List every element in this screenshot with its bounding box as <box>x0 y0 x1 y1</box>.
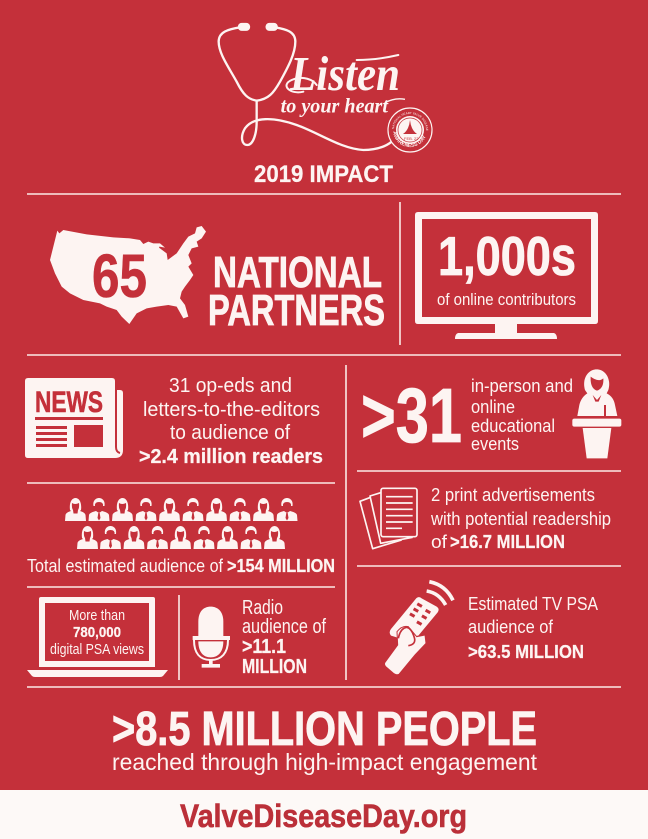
stethoscope tube and ear pieces <box>219 24 392 150</box>
text: of online contributors: of online contributors <box>437 290 576 309</box>
panel: TV PSA audience <box>384 582 598 675</box>
text: radio audience: audience of <box>242 616 326 638</box>
panel: print advertisements <box>360 485 611 552</box>
number: >31: >31 <box>361 373 462 459</box>
text: educational events: online <box>471 396 515 417</box>
text: educational events: events <box>471 433 519 454</box>
script tagline to your heart: to your heart <box>281 96 389 118</box>
footer URL: ValveDiseaseDay.org <box>180 798 467 834</box>
heading: 2019 IMPACT: 2019 IMPACT <box>254 161 393 188</box>
number: 1,000s: 1,000s <box>438 225 576 287</box>
text: radio audience <box>242 597 326 678</box>
panel: total estimated audience <box>27 498 335 576</box>
panel: educational events <box>361 369 621 459</box>
logo: stethoscope and Listen to your heart <box>218 22 433 153</box>
text: print advertisements: >16.7 MILLION <box>450 532 565 552</box>
text: print advertisements: 2 print advertisements <box>431 485 595 505</box>
text: national partners: NATIONAL <box>213 248 382 297</box>
headline: 8.5 million people: >8.5 MILLION PEOPLE <box>112 703 537 756</box>
text: digital PSA views: 780,000 <box>73 625 121 641</box>
text: digital PSA views <box>50 608 144 658</box>
text: educational events: educational <box>471 415 555 436</box>
text: op-eds description: letters-to-the-editors <box>143 399 320 421</box>
panel: online contributors <box>415 212 598 339</box>
text: op-eds description: 31 op-eds and <box>169 375 292 397</box>
icon: crowd of people <box>65 498 298 549</box>
text: print advertisements: of <box>431 532 448 552</box>
text: TV PSA audience: audience of <box>468 617 554 637</box>
text: op-eds description: to audience of <box>170 422 290 444</box>
badge: awareness day seal: AWARENESS DAY <box>393 132 426 148</box>
icon: microphone <box>193 607 230 668</box>
icon: monitor <box>415 212 598 339</box>
script wordmark Listen: Listen <box>289 48 400 101</box>
text: TV PSA audience: >63.5 MILLION <box>468 642 584 662</box>
text: educational events <box>471 375 573 454</box>
flourish on Listen <box>287 55 398 92</box>
text: op-eds description: >2.4 million readers <box>139 446 323 468</box>
text: digital PSA views: digital PSA views <box>50 642 144 658</box>
text: digital PSA views: More than <box>69 608 125 624</box>
text: TV PSA audience <box>468 594 598 662</box>
text: print advertisements <box>430 485 611 552</box>
icon: speaker at podium <box>572 369 621 458</box>
text: total audience: Total estimated audience of <box>27 556 224 576</box>
text: national partners: PARTNERS <box>208 286 385 335</box>
text: national partners <box>208 248 385 335</box>
text: TV PSA audience: Estimated TV PSA <box>468 594 598 614</box>
footer band with website <box>0 790 648 839</box>
icon: hand holding remote <box>384 582 453 675</box>
text: radio audience: MILLION <box>242 656 307 678</box>
panel: high-impact engagement <box>112 703 538 775</box>
panel: radio audience <box>193 597 326 678</box>
text: educational events: in-person and <box>471 375 573 396</box>
icon: newspaper: NEWS <box>35 386 103 419</box>
text: total audience: >154 MILLION <box>227 556 335 576</box>
badge: awareness day seal: FEB. 22 <box>404 136 419 141</box>
icon: newspaper <box>25 378 123 458</box>
text: print advertisements: with potential readership <box>430 509 611 529</box>
panel: op-eds <box>25 375 323 468</box>
panel: national partners <box>50 226 385 335</box>
text: radio audience: >11.1 <box>242 636 286 658</box>
text: radio audience: Radio <box>242 597 283 619</box>
badge: awareness day seal <box>387 107 433 153</box>
panel: digital PSA views <box>27 597 168 677</box>
number: 65: 65 <box>92 242 147 310</box>
subhead: reached through high-impact engagement: reached through high-impact engagement <box>112 749 538 775</box>
icon: stacked documents <box>360 488 417 549</box>
badge: awareness day seal: NATIONAL HEART VALVE DISEASE <box>392 112 428 131</box>
icon: laptop <box>27 597 168 677</box>
text: op-eds description <box>139 375 323 468</box>
icon: US map <box>50 226 206 324</box>
